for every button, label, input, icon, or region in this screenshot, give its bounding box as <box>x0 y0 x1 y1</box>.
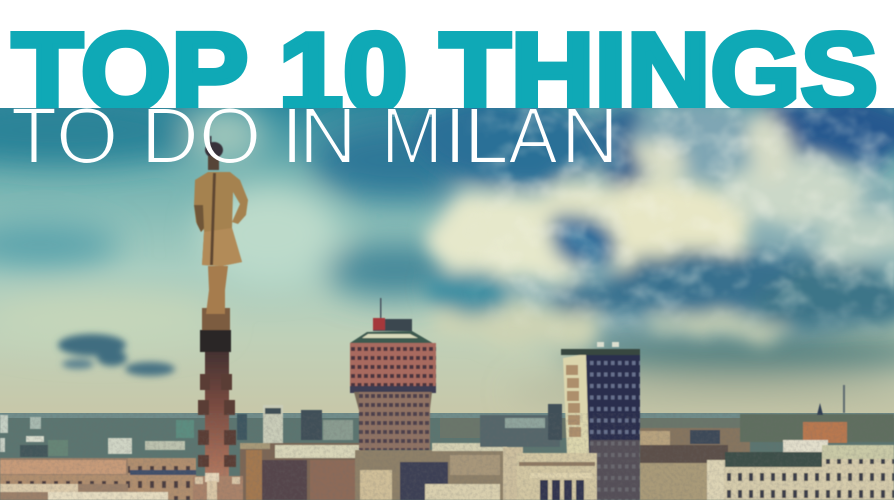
subtitle: TO DO IN MILAN <box>11 91 619 180</box>
subtitle: TO DO IN MILAN: O <box>199 91 261 180</box>
subtitle: TO DO IN MILAN: L <box>464 91 508 180</box>
spire <box>193 308 243 500</box>
right district buildings <box>640 385 894 500</box>
low dark cloud <box>58 334 175 376</box>
distant city band <box>0 413 894 500</box>
subtitle: TO DO IN MILAN: I <box>281 91 303 180</box>
subtitle: TO DO IN MILAN: A <box>508 91 559 180</box>
Right tower <box>561 342 640 500</box>
left district buildings <box>0 415 196 500</box>
subtitle: TO DO IN MILAN: N <box>561 91 619 180</box>
foreground building by tower <box>503 447 597 500</box>
subtitle: TO DO IN MILAN: I <box>444 91 466 180</box>
clouds <box>420 96 894 348</box>
white banner background <box>0 0 894 108</box>
subtitle: TO DO IN MILAN: N <box>299 91 357 180</box>
subtitle: TO DO IN MILAN: T <box>11 91 57 180</box>
sky background <box>0 108 894 428</box>
city grain <box>0 413 894 500</box>
mid district buildings <box>237 404 562 500</box>
subtitle: TO DO IN MILAN: O <box>56 91 118 180</box>
title: TOP 10 THINGS: TOP 10 THINGS <box>12 11 878 134</box>
subtitle: TO DO IN MILAN: D <box>141 91 199 180</box>
Velasca Tower <box>350 298 436 450</box>
soft sky tones <box>0 96 894 402</box>
title banner <box>0 30 894 108</box>
subtitle: TO DO IN MILAN: M <box>381 91 443 180</box>
cloud texture <box>474 108 894 328</box>
statue on the spire <box>194 136 248 314</box>
